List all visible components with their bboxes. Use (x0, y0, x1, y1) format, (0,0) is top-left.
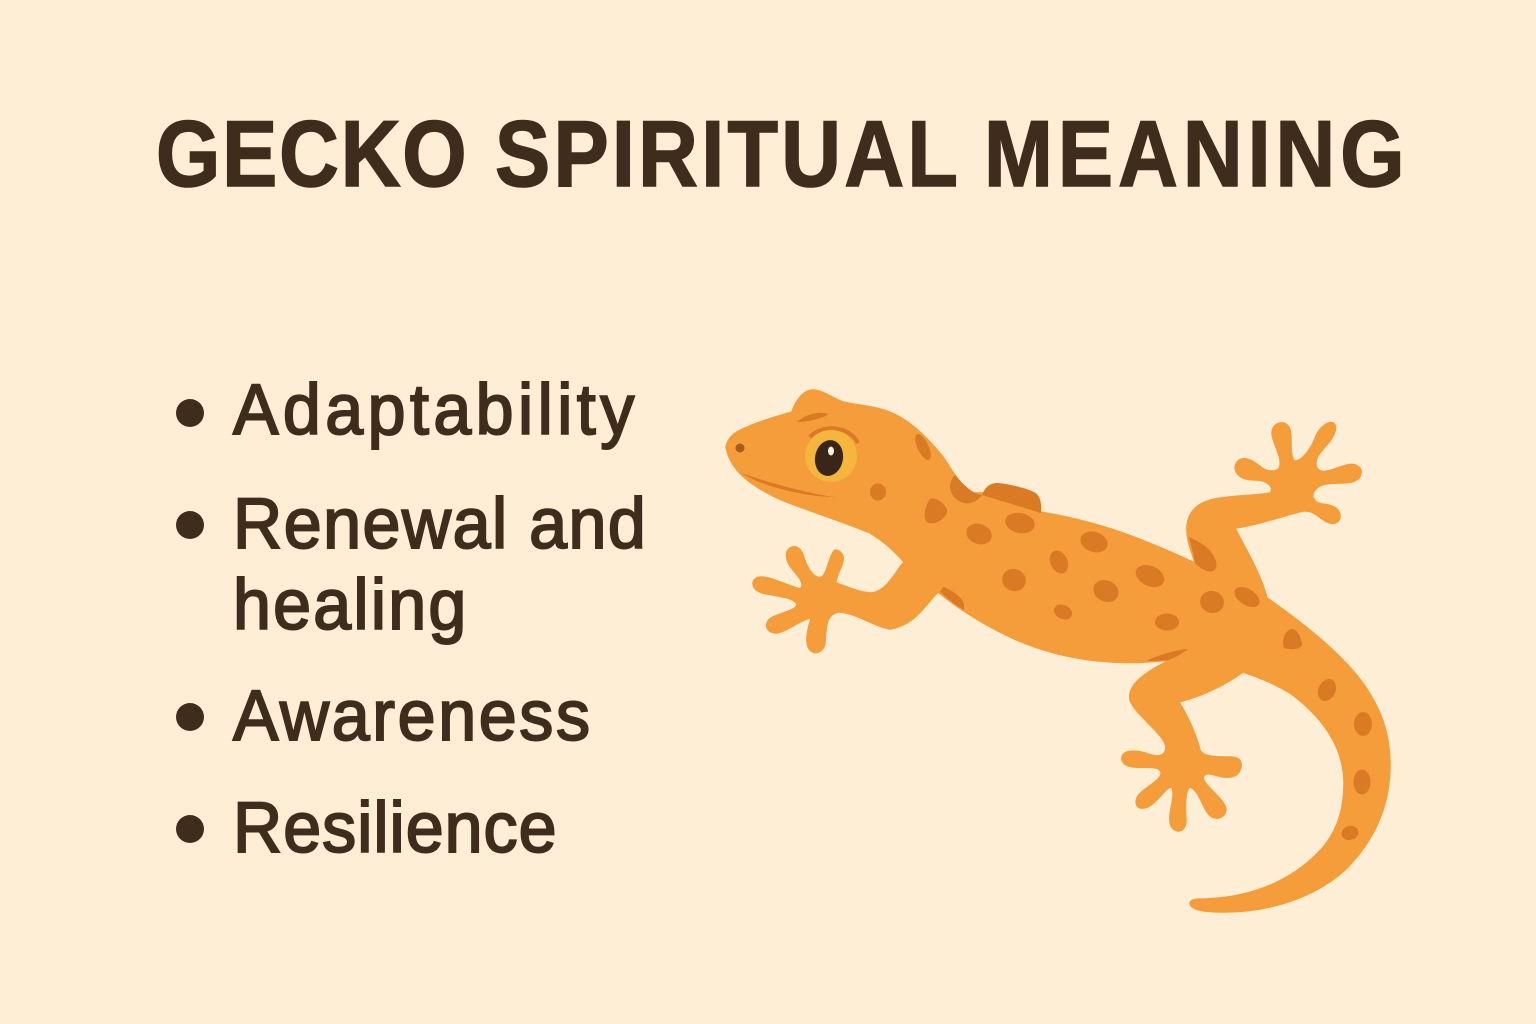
title: GECKO (156, 101, 467, 206)
gecko nostril (736, 444, 744, 452)
gecko eye (805, 430, 857, 482)
title: SPIRITUAL (495, 101, 958, 206)
bullet: Renewal and healing (176, 484, 646, 644)
title: MEANING (984, 101, 1405, 206)
bullet: Renewal and healing: healing (233, 565, 466, 644)
gecko eye ridge (810, 428, 858, 443)
gecko back flap (982, 483, 1041, 513)
gecko illustration (726, 390, 1390, 912)
bullet: Awareness: Awareness (233, 676, 590, 755)
gecko body (726, 390, 1390, 912)
bullet: Renewal and healing: Renewal and (233, 484, 646, 563)
title (156, 101, 1405, 206)
bullet: Resilience: Resilience (233, 788, 557, 867)
gecko shadows and spots (741, 413, 1372, 842)
bullet list (176, 370, 646, 867)
bullet: Adaptability: Adaptability (233, 370, 634, 449)
